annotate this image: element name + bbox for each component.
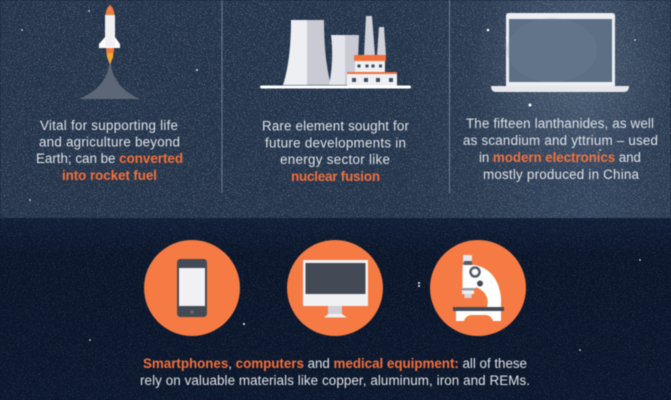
text: helium: Rare element sought for <box>262 118 410 134</box>
text: rare earths: as scandium and yttrium – used <box>463 133 658 148</box>
background: star noise, lower <box>0 218 671 400</box>
icon: laptop <box>491 13 629 92</box>
icon: smartphone <box>144 240 240 336</box>
text: devices caption: Smartphones, computers and medical equipment: all of these <box>143 356 527 371</box>
icon: power plant <box>260 16 411 88</box>
text: rare earths <box>463 116 658 182</box>
divider: right <box>449 0 450 193</box>
background: upper panel <box>0 0 671 218</box>
background: lower panel <box>0 218 671 400</box>
text: helium <box>262 118 410 184</box>
text: rare earths: The fifteen lanthanides, as well <box>466 116 654 131</box>
text: water: and agriculture beyond <box>39 134 180 150</box>
background: nebula glow <box>470 0 670 180</box>
icon: computer monitor <box>287 240 383 336</box>
text: water: into rocket fuel <box>62 168 157 183</box>
icon: rocket <box>79 5 140 99</box>
text: water: Earth; can be converted <box>36 151 183 166</box>
icon: microscope <box>430 240 526 336</box>
text: devices caption: rely on valuable materials like copper, aluminum, iron and REMs. <box>140 373 530 388</box>
text: devices caption <box>140 356 530 388</box>
text: water <box>36 118 183 183</box>
background: bright stars <box>21 10 641 351</box>
text: helium: energy sector like <box>280 152 390 167</box>
text: helium: nuclear fusion <box>291 169 380 184</box>
divider: left <box>222 0 223 193</box>
text: rare earths: mostly produced in China <box>483 167 640 182</box>
background: star noise, upper <box>0 0 671 218</box>
text: helium: future developments in <box>265 136 406 150</box>
text: rare earths: in modern electronics and <box>479 150 641 165</box>
text: water: Vital for supporting life <box>40 118 178 133</box>
